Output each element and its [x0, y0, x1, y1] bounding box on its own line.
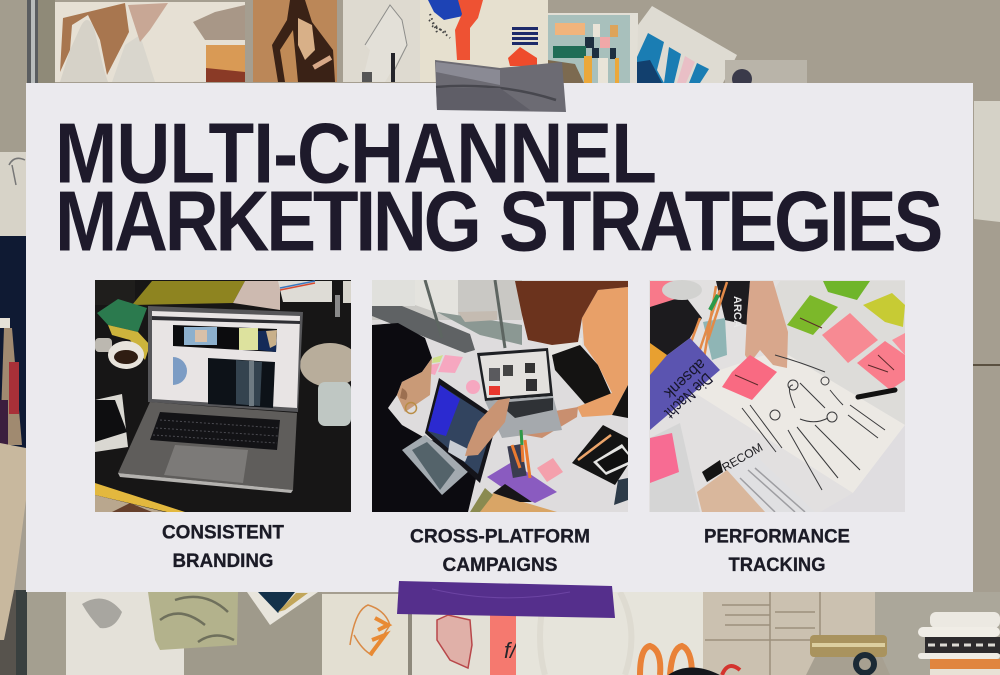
caption line: branding: BRANDING	[172, 550, 274, 572]
caption line: campaigns: CAMPAIGNS	[442, 554, 558, 576]
top artwork: blue print	[637, 6, 737, 83]
top artwork: portrait	[253, 0, 337, 82]
bottom artwork	[66, 592, 875, 675]
top artwork: figure collage	[55, 2, 245, 82]
caption line: tracking: TRACKING	[728, 554, 826, 576]
hand drawn diagram and notes	[742, 355, 885, 490]
title line 2, first word: MARKETING	[55, 174, 482, 269]
purple magazine: absenk	[660, 355, 709, 402]
top artwork: small face	[732, 69, 752, 89]
purple magazine	[650, 338, 720, 430]
caption line: consistent: CONSISTENT	[162, 522, 284, 544]
lower left card with pink note	[650, 423, 700, 512]
left edge items: bag, fabric and pegs	[0, 152, 26, 640]
caption: consistent branding	[162, 522, 284, 572]
blue laptop	[402, 378, 498, 495]
title line 1: MULTI-CHANNEL	[55, 106, 657, 201]
title	[55, 106, 943, 269]
decorative purple tape	[397, 581, 615, 618]
table items	[470, 425, 628, 512]
face and earring	[397, 358, 432, 414]
desk items top left	[650, 280, 750, 368]
top artwork: pixel print	[548, 13, 638, 83]
desk items top left: ARCA	[731, 296, 743, 328]
photo: laptop on a dark desk	[95, 280, 360, 512]
lower documents: RECOM	[720, 440, 765, 475]
title line 2, second word: STRATEGIES	[499, 174, 943, 269]
caption line: cross-platform: CROSS-PLATFORM	[410, 526, 590, 548]
photo: two people working at a laptop	[372, 280, 628, 512]
grey laptop	[477, 348, 562, 438]
marker pen	[858, 390, 895, 397]
panel: main white card	[26, 83, 973, 592]
top artwork: small translucent photo	[725, 60, 807, 83]
top artwork: colour collage	[420, 0, 548, 82]
purple magazine: Die Nacht	[661, 369, 716, 423]
lower documents	[697, 443, 806, 512]
caption line: performance: PERFORMANCE	[704, 526, 850, 548]
person in orange with long hair	[515, 281, 628, 438]
laptop screen	[148, 306, 303, 412]
hand	[745, 281, 788, 368]
raised hand	[465, 398, 510, 456]
caption: cross-platform campaigns	[410, 526, 590, 576]
person with dark hair	[372, 323, 480, 512]
caption: performance tracking	[704, 526, 850, 576]
photo: sticky notes planning board	[649, 280, 905, 512]
bottom artwork: f/	[504, 638, 518, 663]
decorative grey tape	[435, 60, 566, 112]
sticky notes	[722, 281, 905, 400]
laptop base	[118, 402, 297, 493]
pink notes	[428, 355, 480, 394]
bottom objects: scissors, jar and tape rolls	[640, 612, 1000, 675]
top artwork: fashion sketch	[343, 0, 420, 82]
right edge poster	[974, 101, 1000, 222]
